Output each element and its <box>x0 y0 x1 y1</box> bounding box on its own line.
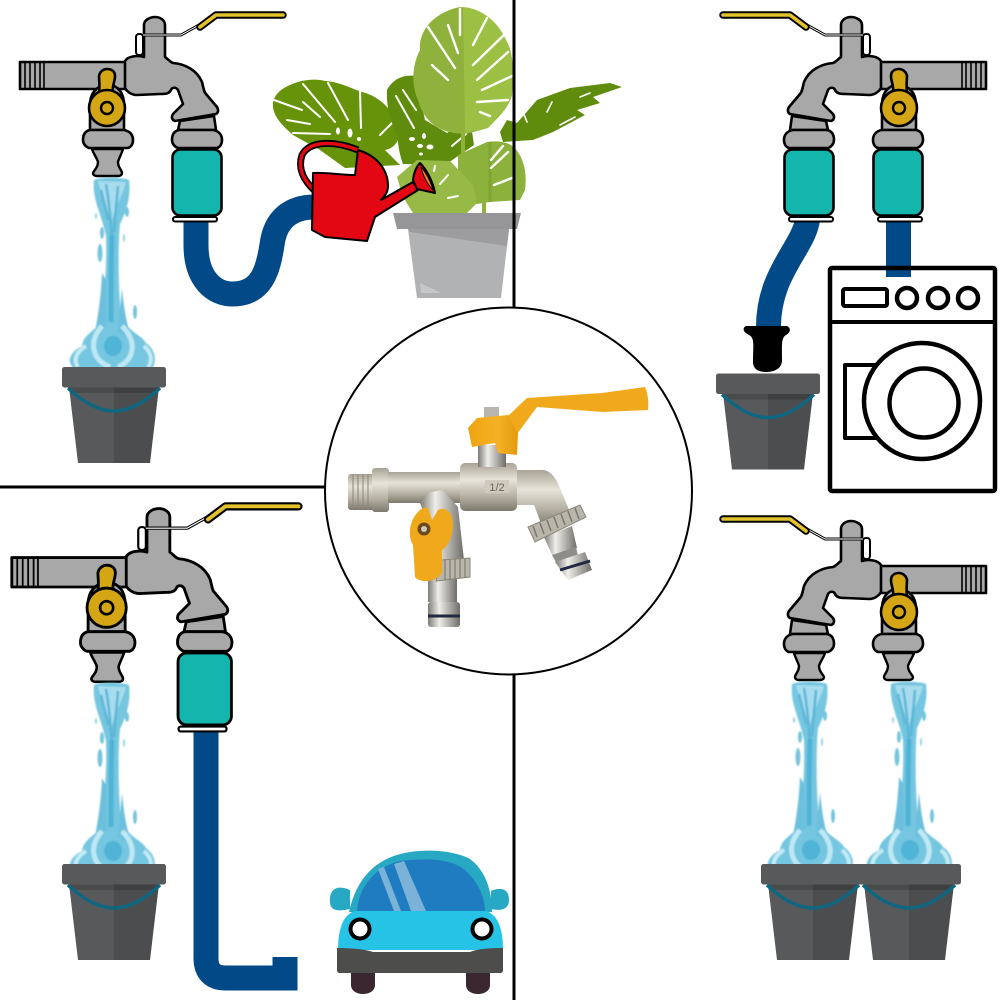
top bolt <box>484 407 499 418</box>
bucket <box>62 864 166 960</box>
leaf: dark left monstera <box>273 80 400 168</box>
panel: top-right washing machine and bucket <box>716 15 995 491</box>
water stream left <box>768 682 853 872</box>
leaf: large light monstera <box>413 7 513 165</box>
tap <box>723 519 986 680</box>
leaf: narrow right monstera <box>500 83 622 142</box>
leaf: lower right monstera <box>458 141 526 205</box>
right knurled nut <box>528 505 586 542</box>
hose <box>206 726 285 978</box>
water stream right <box>867 682 952 872</box>
panel: bottom-left car wash and bucket <box>12 506 509 994</box>
main pipe <box>348 468 463 512</box>
lower lever <box>410 508 453 581</box>
right elbow <box>515 470 570 526</box>
leaf: lower centre monstera <box>397 160 477 213</box>
tap <box>12 506 298 731</box>
watering can <box>300 143 435 241</box>
centre body <box>460 463 517 511</box>
panel: bottom-right two buckets <box>723 519 986 960</box>
panel: top-left watering plant and bucket <box>20 7 622 463</box>
tap with two hose connectors <box>723 15 986 222</box>
bucket <box>716 374 820 470</box>
tap with two outlets <box>20 15 283 222</box>
washing machine <box>830 268 995 491</box>
bucket <box>62 367 166 463</box>
lower branch <box>420 490 464 560</box>
plant stems <box>482 195 486 213</box>
plant <box>273 7 622 213</box>
centre circle with product photo <box>325 308 692 674</box>
car <box>330 851 509 994</box>
product: double outlet tap <box>348 387 648 627</box>
right connector <box>544 526 592 580</box>
plant pot <box>393 213 521 298</box>
funnel <box>744 326 790 372</box>
bucket right <box>857 864 961 960</box>
divider lines <box>0 0 514 1000</box>
bucket left <box>761 864 865 960</box>
water stream <box>70 178 155 368</box>
hose <box>196 207 315 294</box>
centre body: 1/2 <box>489 482 505 494</box>
stem <box>478 445 506 467</box>
hose to washing machine <box>886 216 911 277</box>
lower connector <box>428 578 460 627</box>
hose to bucket <box>768 214 808 328</box>
water stream <box>70 683 155 873</box>
leaf: dark middle monstera <box>387 76 474 165</box>
lower nut <box>436 558 470 581</box>
top lever <box>468 387 648 455</box>
